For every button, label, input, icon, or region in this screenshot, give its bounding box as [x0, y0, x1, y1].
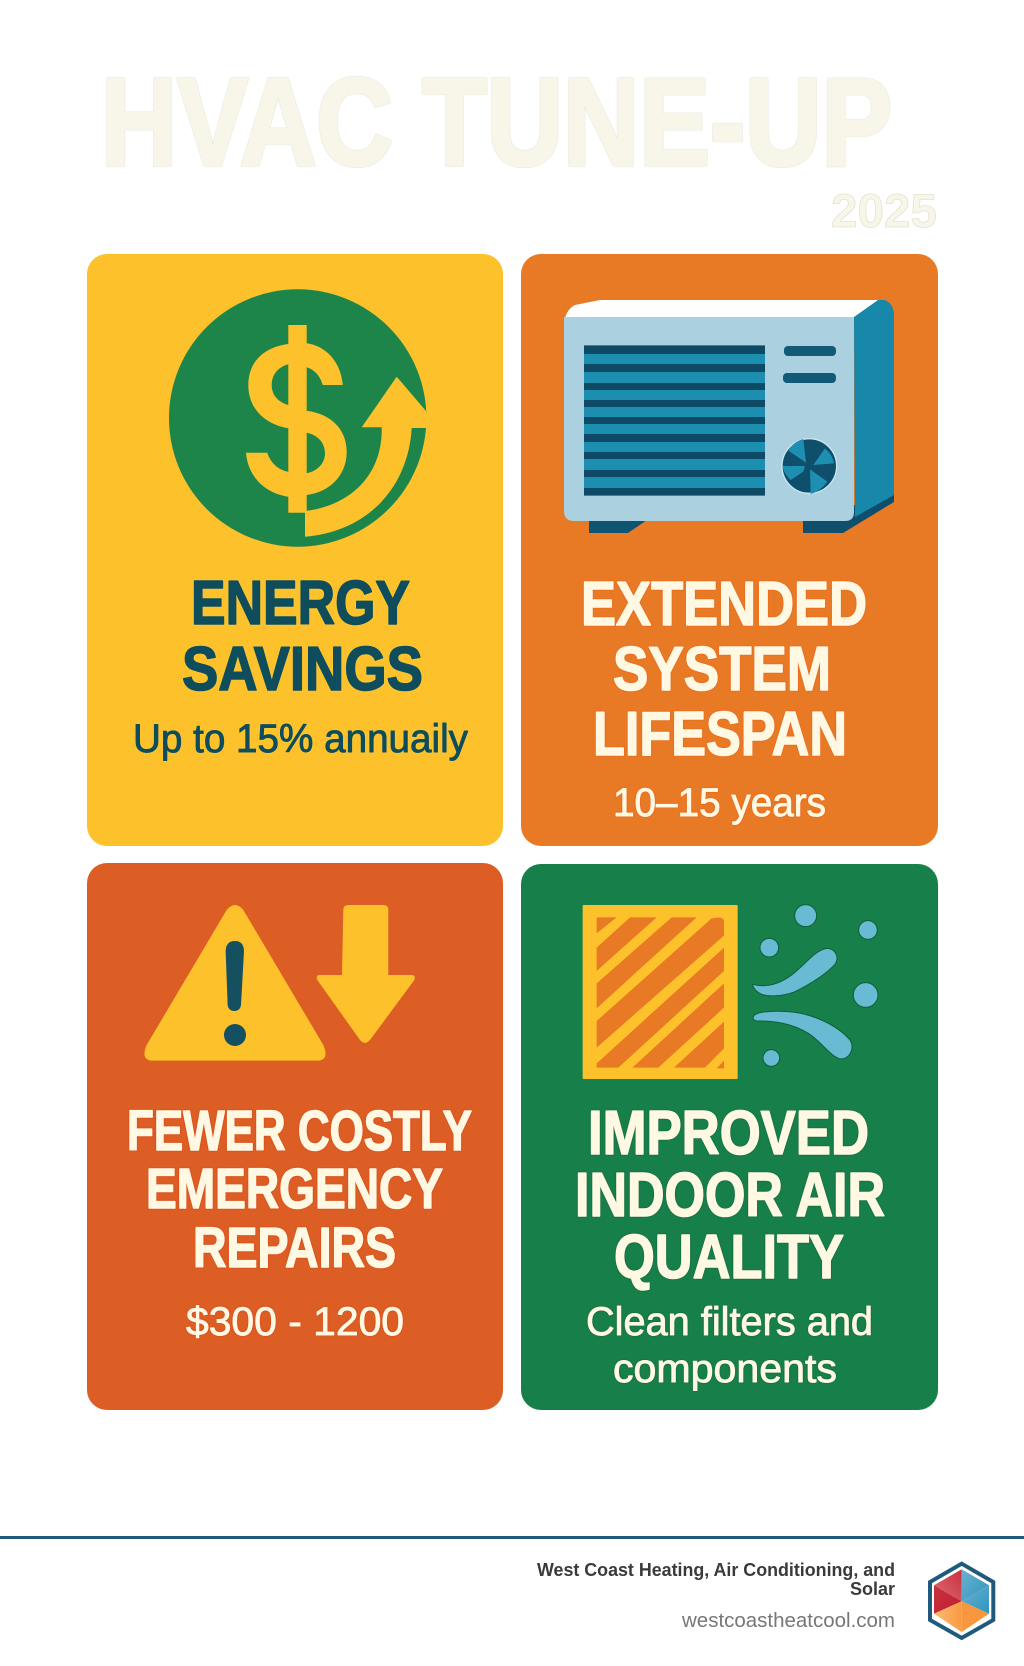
- heading: energy savings: SAVINGS: [182, 635, 423, 704]
- icon: air conditioner unit: [564, 300, 894, 533]
- heading: energy savings: ENERGY: [191, 569, 410, 638]
- heading: energy savings: [182, 569, 423, 704]
- stat: clean filters and components: Clean filters and: [586, 1300, 873, 1344]
- heading: fewer costly emergency repairs: REPAIRS: [193, 1216, 396, 1280]
- footer: [0, 1536, 1024, 1638]
- heading: fewer costly emergency repairs: EMERGENCY: [146, 1157, 443, 1221]
- icon: dollar with rising arrow: [169, 289, 428, 547]
- heading: extended system lifespan: [581, 570, 867, 769]
- company name: [537, 1560, 895, 1599]
- heading: improved indoor air quality: INDOOR AIR: [575, 1161, 885, 1230]
- year: 2025: [831, 184, 937, 237]
- heading: extended system lifespan: SYSTEM: [613, 635, 831, 704]
- website: westcoastheatcool.com: [681, 1610, 895, 1632]
- stat: clean filters and components: components: [613, 1347, 837, 1391]
- heading: fewer costly emergency repairs: [127, 1099, 472, 1280]
- icon: warning triangle and down arrow: [144, 905, 415, 1061]
- panel: fewer costly emergency repairs: [87, 863, 503, 1410]
- company name: Solar: [850, 1579, 895, 1599]
- heading: extended system lifespan: EXTENDED: [581, 570, 867, 639]
- panel: improved indoor air quality: [521, 864, 938, 1410]
- heading: improved indoor air quality: QUALITY: [614, 1223, 844, 1292]
- company name: West Coast Heating, Air Conditioning, and: [537, 1560, 895, 1580]
- panel: energy savings: [87, 254, 503, 846]
- icon: hexagon logo: [930, 1564, 993, 1638]
- heading: improved indoor air quality: IMPROVED: [588, 1099, 869, 1168]
- stat: up to 15% annually: Up to 15% annuaily: [133, 717, 468, 761]
- title: HVAC TUNE-UP: [101, 54, 892, 192]
- heading: extended system lifespan: LIFESPAN: [593, 700, 847, 769]
- panel: extended system lifespan: [521, 254, 938, 846]
- stat: 10-15 years: 10–15 years: [613, 781, 826, 825]
- stat: repair cost: $300 - 1200: [186, 1300, 404, 1344]
- stat: clean filters and components: [586, 1300, 873, 1391]
- heading: improved indoor air quality: [575, 1099, 885, 1292]
- heading: fewer costly emergency repairs: FEWER COSTLY: [127, 1099, 472, 1163]
- icon: air filter and particles: [583, 905, 878, 1079]
